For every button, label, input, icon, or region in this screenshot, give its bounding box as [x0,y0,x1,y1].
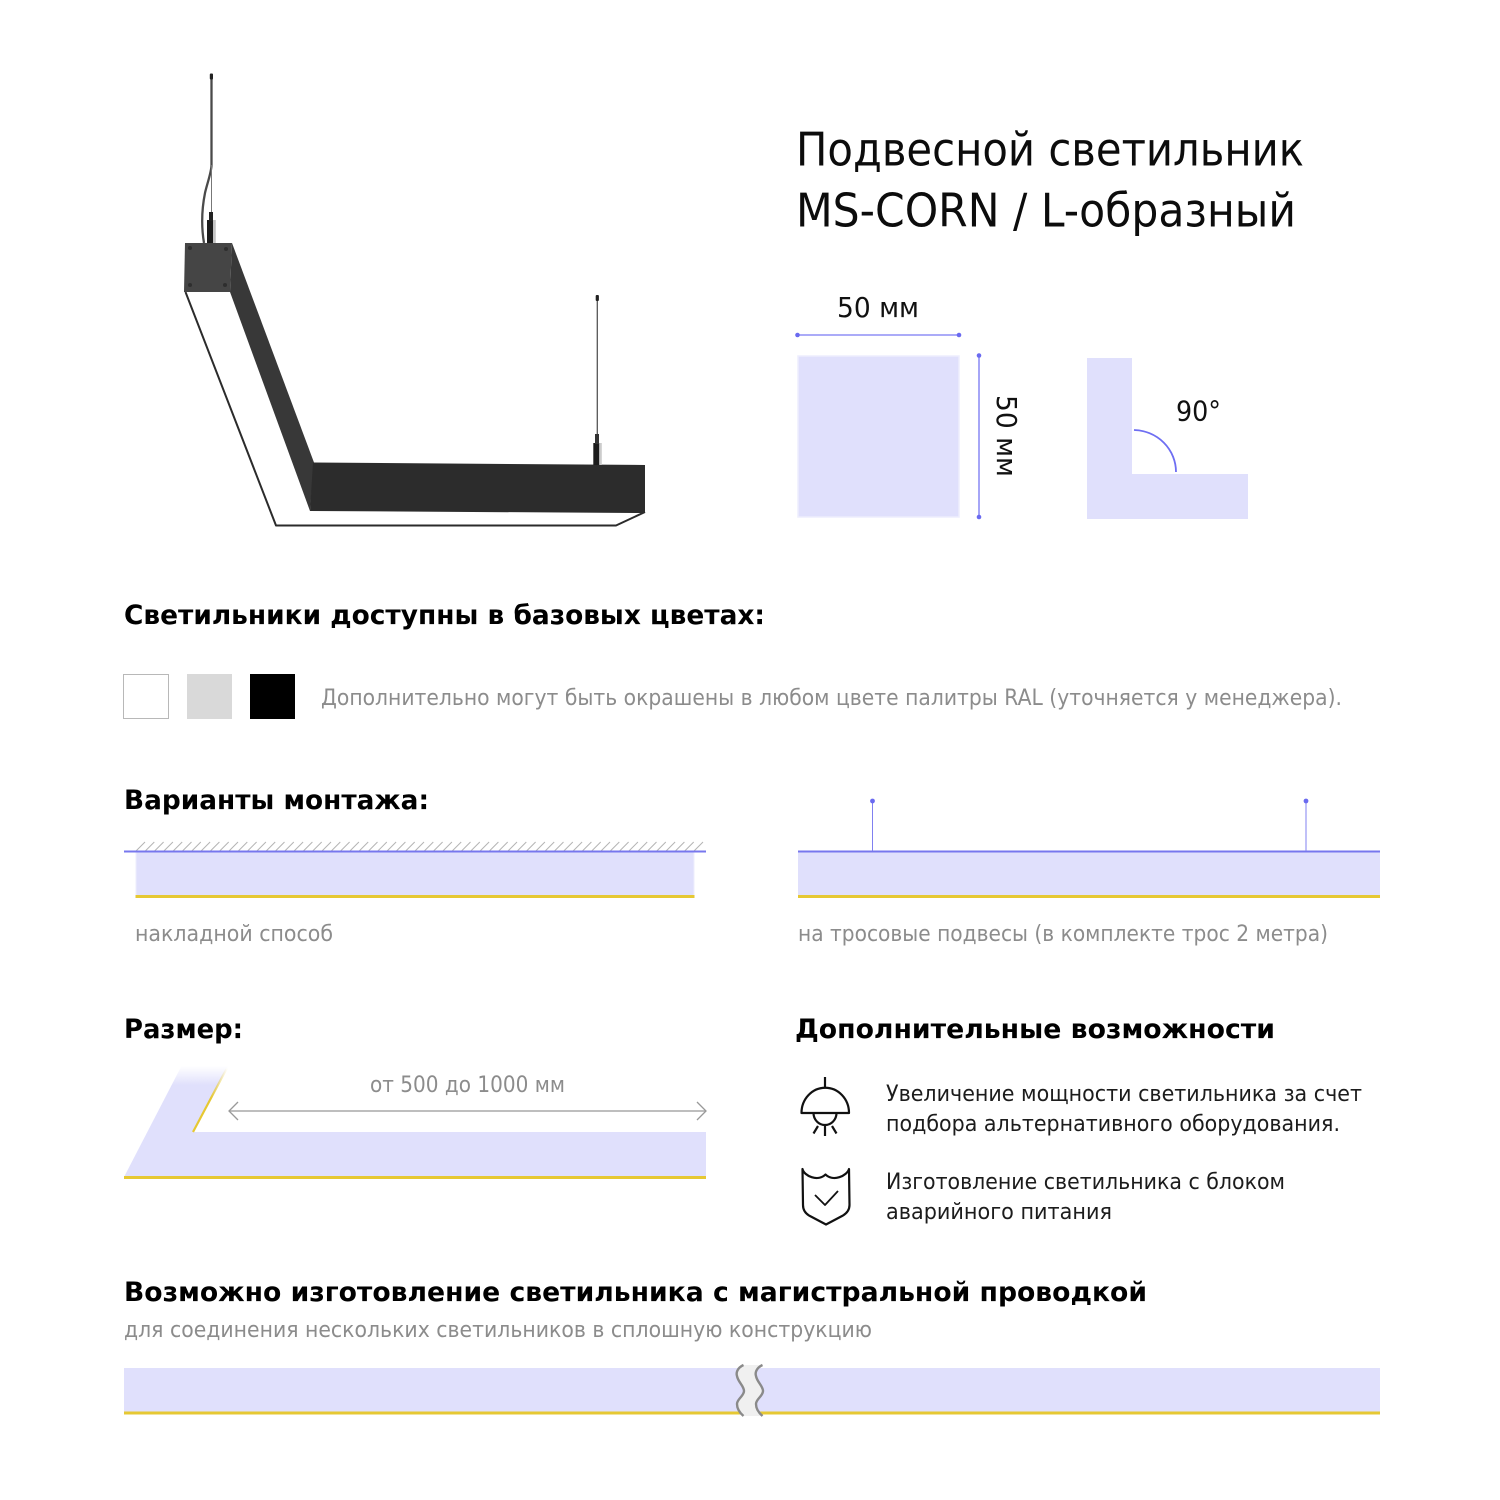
caption: surface mounting: накладной способ [135,922,333,947]
size diagram [124,1066,706,1179]
heading: mounting options: Варианты монтажа: [124,785,429,816]
cross-section square with dimensions [795,291,1023,519]
caption: cable suspension: на тросовые подвесы (в комплекте трос 2 метра) [798,922,1328,947]
angle diagram: 90 degrees: 90° [1176,394,1221,428]
icon: pendant lamp [802,1077,849,1136]
RAL note: Дополнительно могут быть окрашены в любом цвете палитры RAL (уточняется у менеджера). [321,686,1342,711]
title: Подвесной светильник [796,122,1304,176]
text: power increase [886,1082,1362,1137]
cross-section square with dimensions: 50 мм [990,395,1023,477]
heading: base colours: Светильники доступны в базовых цветах: [124,600,765,631]
heading: through wiring: Возможно изготовление светильника с магистральной проводкой [124,1277,1147,1308]
text: power increase: подбора альтернативного оборудования. [886,1112,1340,1137]
through wiring bar with break [124,1365,1380,1416]
cross-section square with dimensions: 50 мм [837,291,919,324]
title: MS-CORN / L-образный [796,184,1296,238]
subtitle: through wiring: для соединения нескольких светильников в сплошную конструкцию [124,1318,872,1343]
product image: L-shaped pendant luminaire [184,74,645,526]
angle diagram: 90 degrees [1087,358,1248,519]
title [796,122,1304,238]
heading: size: Размер: [124,1014,243,1045]
heading: additional features: Дополнительные возможности [795,1014,1275,1045]
colour swatches [124,674,295,719]
icon: shield with check [802,1169,850,1224]
cable suspension diagram [798,799,1380,898]
text: emergency power [886,1170,1285,1225]
text: power increase: Увеличение мощности светильника за счет [886,1082,1362,1107]
text: emergency power: Изготовление светильника с блоком [886,1170,1285,1195]
text: emergency power: аварийного питания [886,1200,1112,1225]
surface mounting diagram [124,842,706,898]
size diagram: от 500 до 1000 мм [370,1073,565,1098]
